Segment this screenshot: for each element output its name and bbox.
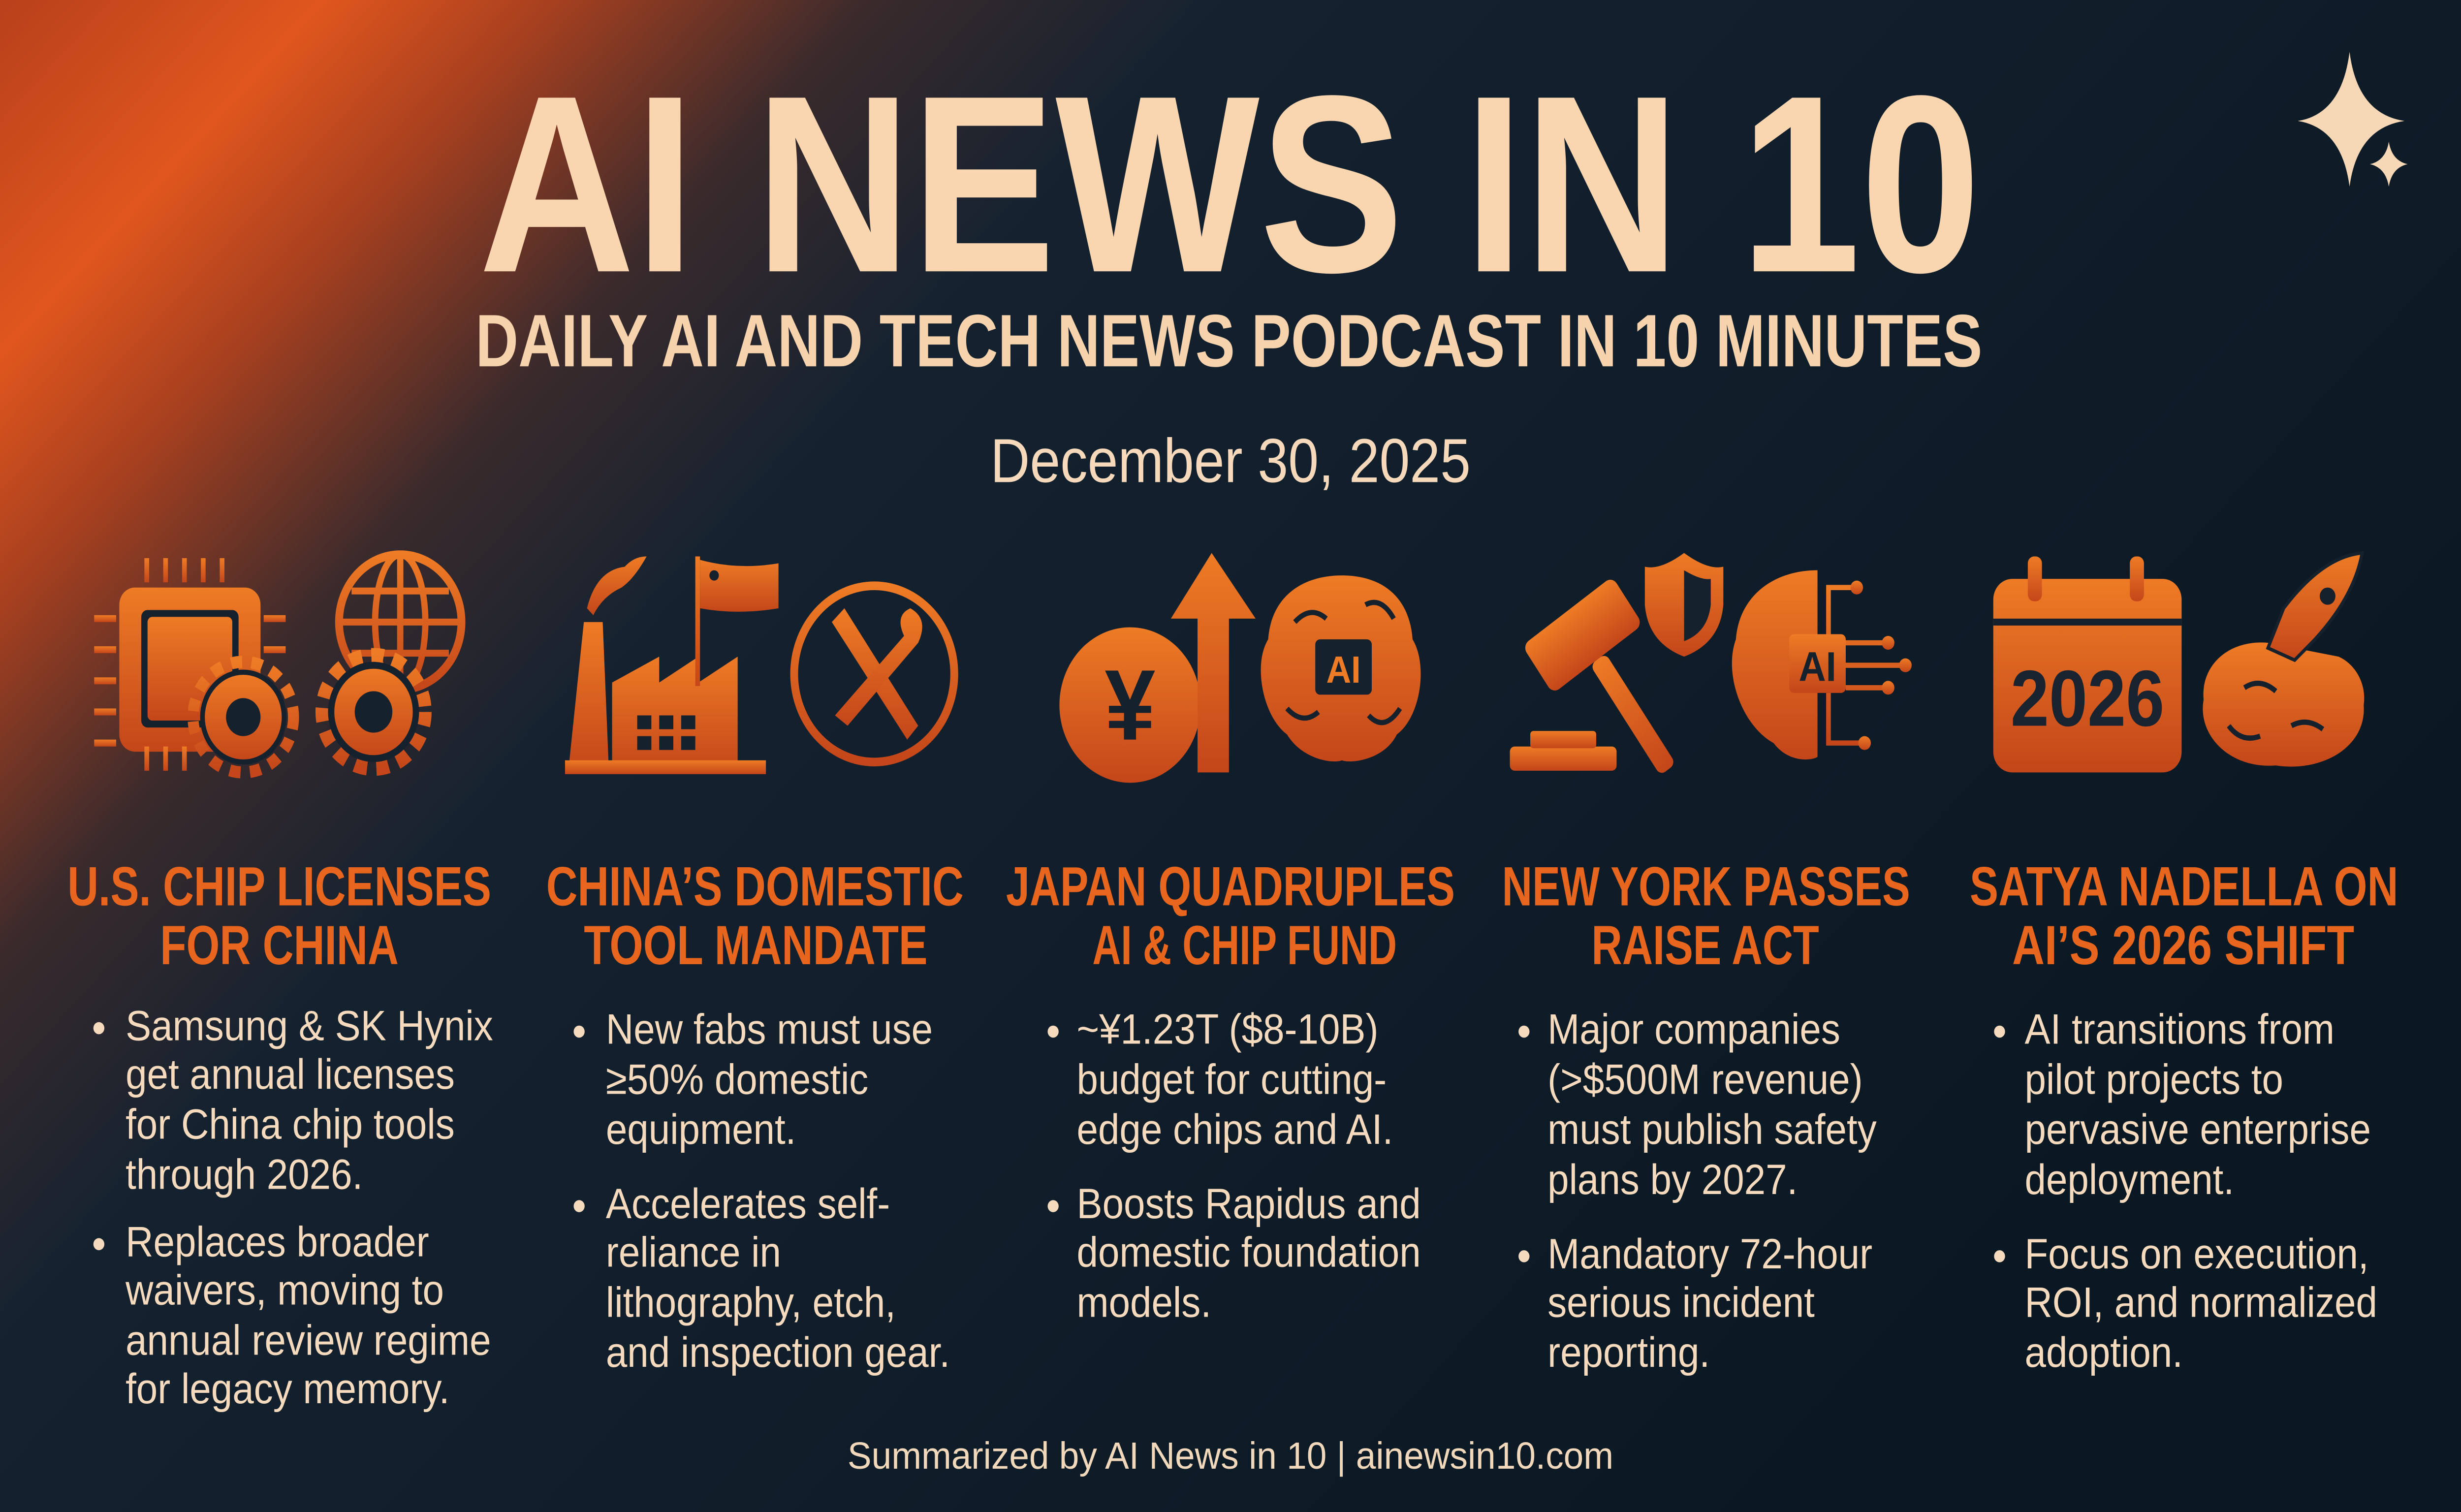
column 4: New York RAISE Act (1502, 855, 1910, 1376)
bullets col4: plans by 2027. (1547, 1157, 1798, 1203)
heading col2: CHINA’S DOMESTIC (546, 855, 964, 917)
icon group: yen coin, arrow, AI brain: ¥ (1104, 649, 1155, 761)
bullets col2: and inspection gear. (606, 1329, 950, 1376)
heading col1: FOR CHINA (160, 914, 399, 976)
bullets col1: get annual licenses (126, 1051, 455, 1098)
title: AI NEWS IN 10 (479, 43, 1981, 325)
bullets col1: for China chip tools (126, 1101, 455, 1148)
heading col4: NEW YORK PASSES (1502, 855, 1910, 917)
bullets col5: Focus on execution, (2025, 1231, 2369, 1278)
bullets col1 (94, 1003, 493, 1413)
bullets col2: lithography, etch, (606, 1279, 896, 1326)
bullets col4: (>$500M revenue) (1547, 1056, 1863, 1103)
bullets col2: New fabs must use (606, 1006, 933, 1053)
column 2: China's domestic tool mandate (546, 855, 964, 1376)
icon group: factory, flag, tools (565, 556, 954, 774)
column 1: U.S. chip licenses (67, 855, 493, 1413)
heading col3: JAPAN QUADRUPLES (1006, 855, 1455, 917)
bullets col3: domestic foundation (1076, 1229, 1421, 1276)
bullets col1: annual review regime (126, 1317, 491, 1364)
bullets col4: Mandatory 72-hour (1547, 1231, 1872, 1278)
icon group: chip, gears, globe (94, 555, 462, 772)
bullets col2: ≥50% domestic (606, 1056, 868, 1103)
heading col2: TOOL MANDATE (584, 914, 928, 976)
bullets col3: Boosts Rapidus and (1076, 1181, 1421, 1228)
bullets col5: pilot projects to (2025, 1056, 2283, 1103)
bullets col3: budget for cutting- (1076, 1056, 1387, 1103)
bullets col1: Samsung & SK Hynix (126, 1003, 493, 1049)
subtitle: DAILY AI AND TECH NEWS PODCAST IN 10 MINUTES (475, 299, 1982, 382)
bullets col2 (573, 1006, 950, 1376)
icon group: calendar 2026, rocket brain: 2026 (2011, 654, 2164, 743)
bullets col5: pervasive enterprise (2025, 1106, 2371, 1153)
heading col5: SATYA NADELLA ON (1970, 855, 2398, 917)
bullets col4: Major companies (1547, 1006, 1840, 1053)
bullets col2: reliance in (606, 1229, 781, 1276)
heading col4 (1502, 855, 1910, 976)
column 3: Japan fund (1006, 855, 1455, 1326)
icon group: yen coin, arrow, AI brain: AI (1326, 648, 1361, 691)
heading col2 (546, 855, 964, 976)
heading col1 (67, 855, 491, 976)
bullets col5 (1994, 1006, 2377, 1376)
column 5: Satya Nadella (1970, 855, 2398, 1376)
bullets col5: AI transitions from (2025, 1006, 2335, 1053)
bullets col1: Replaces broader (126, 1219, 429, 1265)
bullets col3: ~¥1.23T ($8-10B) (1076, 1006, 1379, 1053)
icon group: calendar 2026, rocket brain (1993, 553, 2364, 772)
bullets col4: reporting. (1547, 1329, 1710, 1376)
heading col3: AI & CHIP FUND (1092, 914, 1397, 976)
icon group: yen coin, arrow, AI brain (1059, 553, 1420, 783)
bullets col1: for legacy memory. (126, 1365, 449, 1413)
heading col1: U.S. CHIP LICENSES (67, 855, 491, 917)
bullets col4: serious incident (1547, 1279, 1815, 1326)
bullets col5: adoption. (2025, 1329, 2183, 1376)
bullets col3: models. (1076, 1279, 1211, 1326)
bullets col3: edge chips and AI. (1076, 1106, 1393, 1153)
icon group: gavel, shield, AI circuit brain: AI (1798, 644, 1836, 690)
heading col4: RAISE ACT (1591, 914, 1819, 976)
icon group: gavel, shield, AI circuit brain (1510, 553, 1912, 804)
heading col3 (1006, 855, 1455, 976)
bullets col5: ROI, and normalized (2025, 1279, 2377, 1326)
icon: sparkle (2298, 52, 2408, 187)
bullets col1: through 2026. (126, 1151, 363, 1198)
bullets col1: waivers, moving to (125, 1267, 444, 1314)
bullets col2: equipment. (606, 1106, 796, 1153)
bullets col3 (1048, 1006, 1421, 1326)
bullets col4 (1518, 1006, 1877, 1376)
bullets col2: Accelerates self- (606, 1181, 890, 1228)
heading col5: AI’S 2026 SHIFT (2012, 914, 2354, 976)
bullets col4: must publish safety (1547, 1106, 1877, 1153)
footer: Summarized by AI News in 10 | ainewsin10.com (848, 1434, 1613, 1477)
date: December 30, 2025 (990, 426, 1471, 496)
heading col5 (1970, 855, 2398, 976)
bullets col5: deployment. (2025, 1157, 2234, 1203)
